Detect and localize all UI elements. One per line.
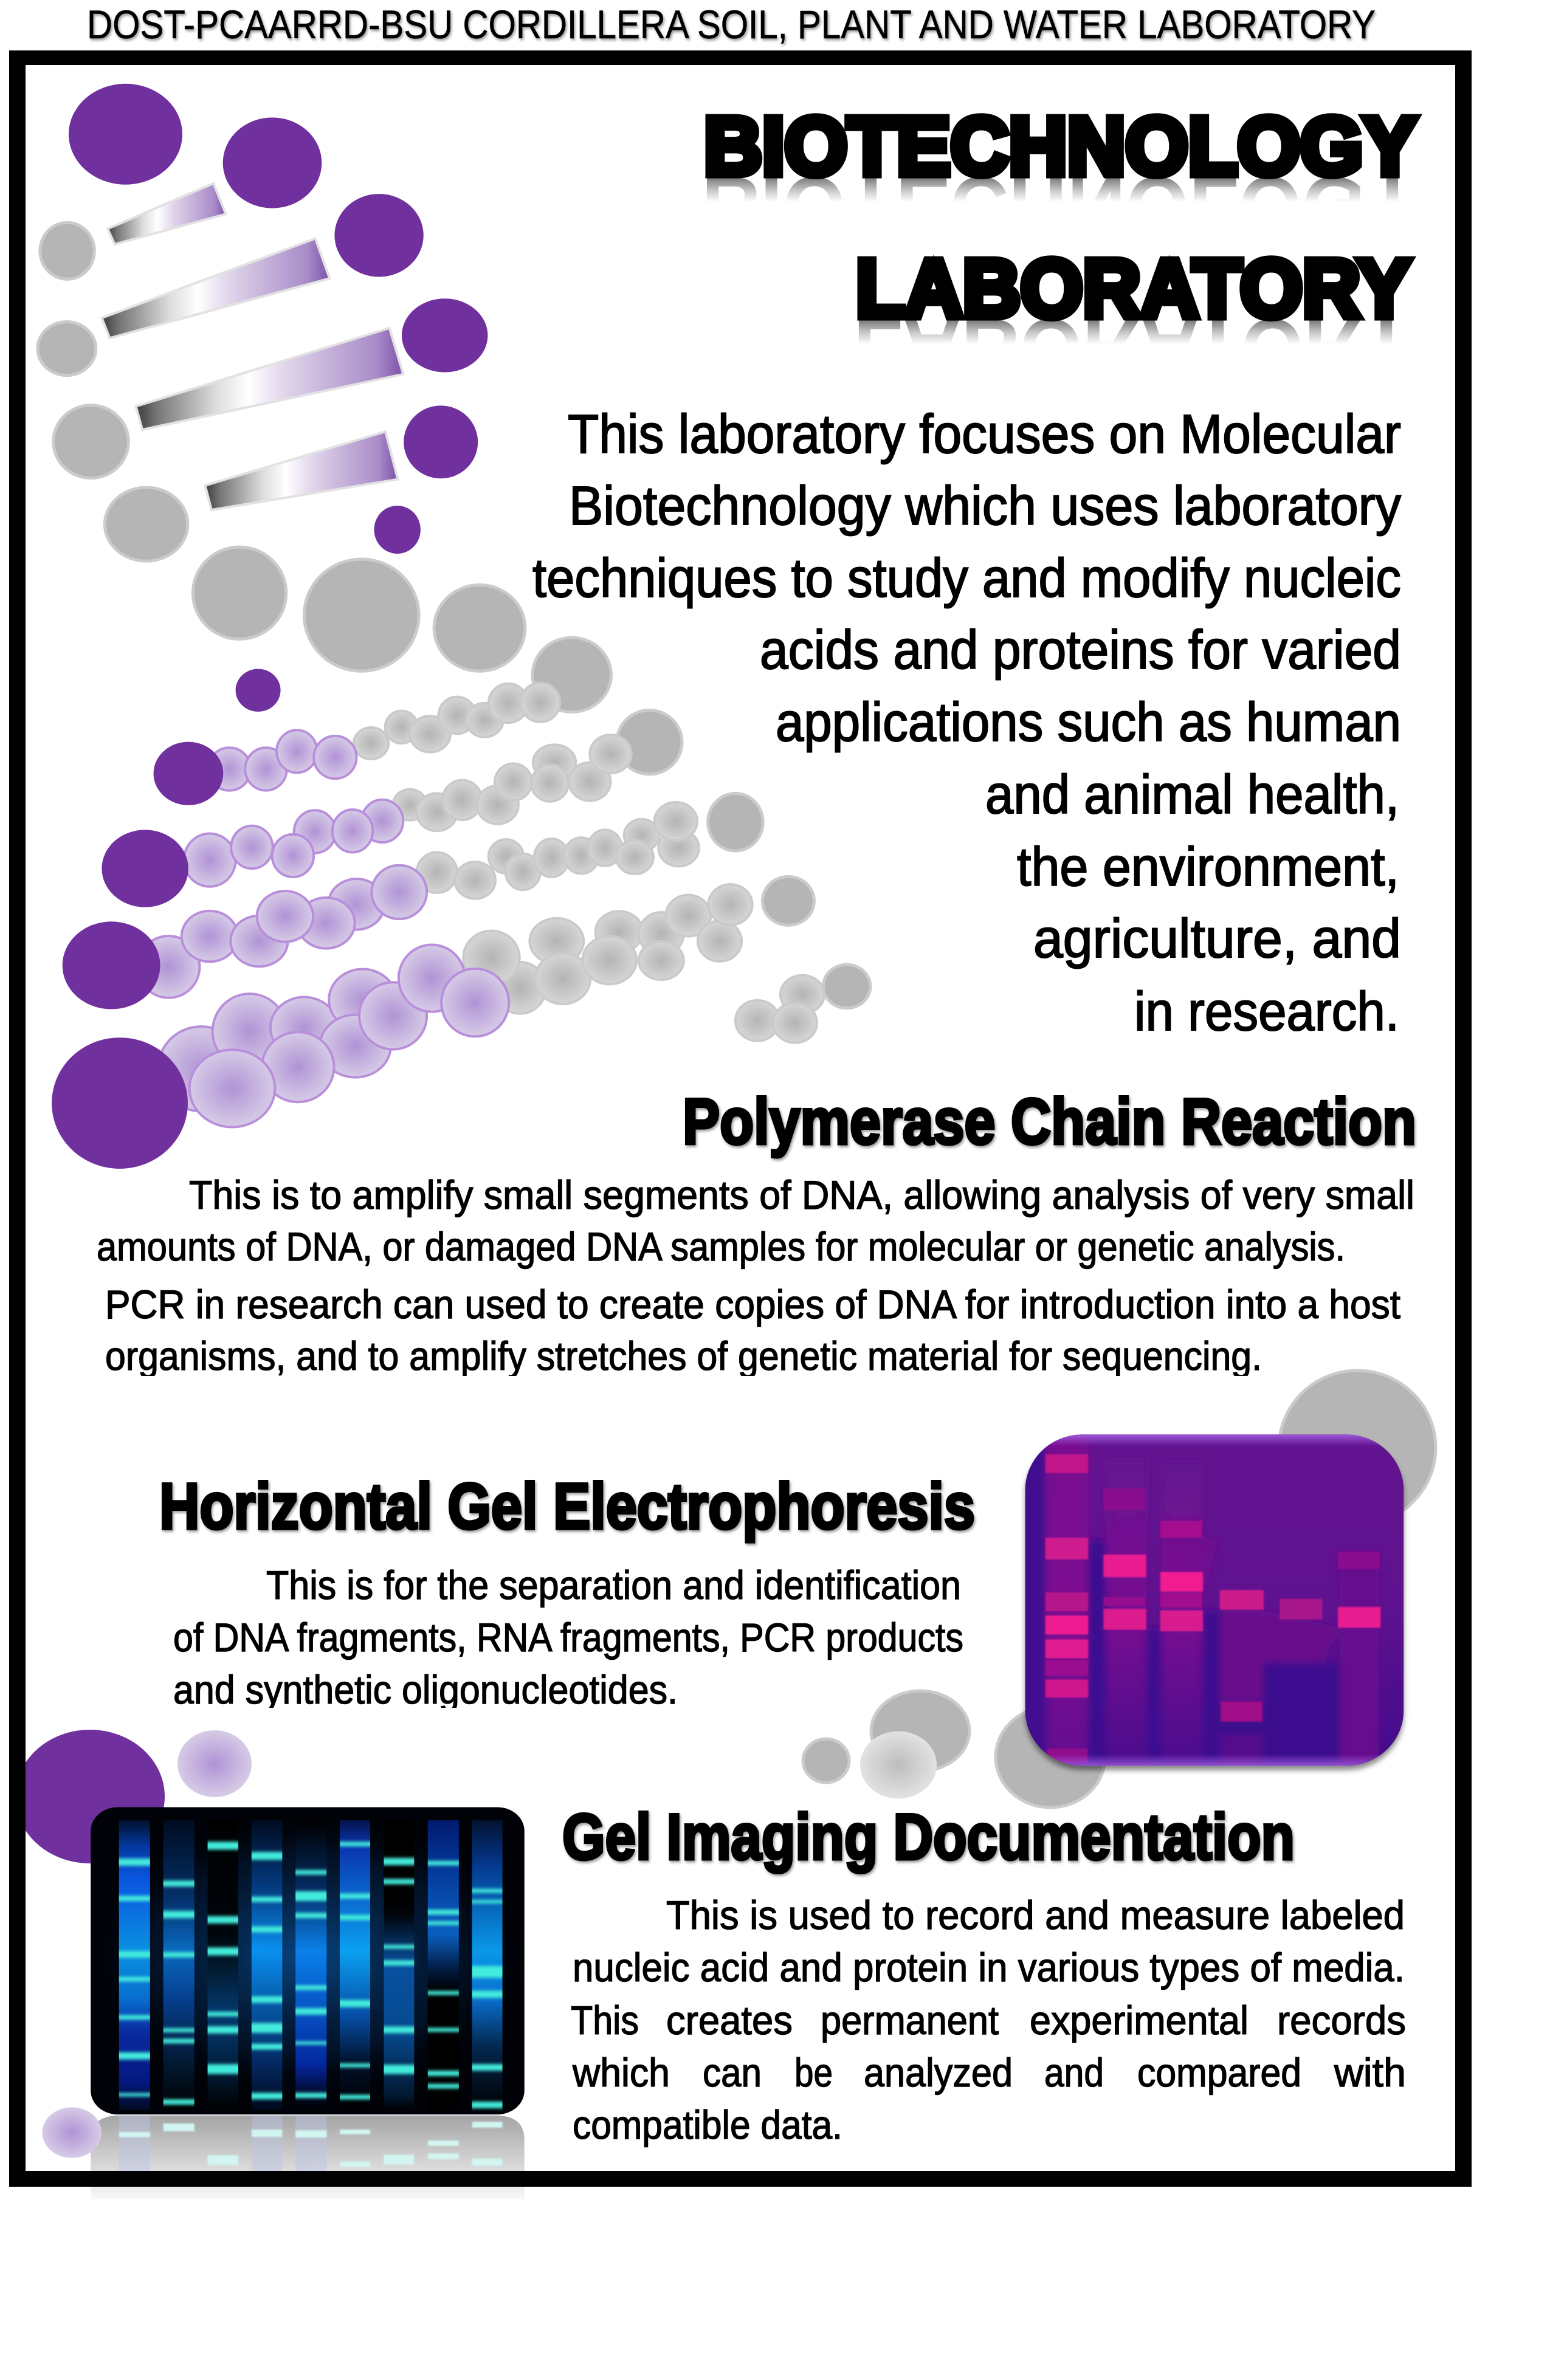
bubble row 3 bbox=[138, 802, 699, 998]
gel imaging paragraph bbox=[571, 1893, 1406, 2147]
bubble row 5 bbox=[735, 975, 824, 1043]
PCR paragraph: This is to amplify small segments of DNA, allowing analysis of very small bbox=[189, 1172, 1414, 1217]
electrophoresis paragraph: This is for the separation and identification bbox=[266, 1563, 961, 1608]
heading: polymerase chain reaction: Polymerase Chain Reaction bbox=[683, 1085, 1416, 1158]
big purple circle behind blue gel bbox=[15, 1730, 165, 1863]
bubble row 2 bbox=[184, 735, 632, 887]
title with reflection: BIOTECHNOLOGY bbox=[701, 159, 1419, 253]
decorative grey circle behind purple gel, top right bbox=[1279, 1371, 1436, 1525]
intro paragraph: applications such as human bbox=[776, 692, 1401, 753]
intro paragraph: the environment, bbox=[1017, 837, 1399, 898]
grey circle behind purple gel, bottom left bbox=[996, 1707, 1105, 1807]
gel panel bbox=[91, 1807, 525, 2114]
gel glow and lanes bbox=[119, 1820, 503, 2111]
light purple circle on reflection bbox=[42, 2107, 102, 2158]
gel panel bbox=[1025, 1434, 1404, 1766]
heading: horizontal gel electrophoresis: Horizontal Gel Electrophoresis bbox=[159, 1470, 975, 1543]
grey helix strand bbox=[38, 222, 188, 561]
PCR paragraph: amounts of DNA, or damaged DNA samples for molecular or genetic analysis. bbox=[97, 1224, 1345, 1269]
gel imaging paragraph: This is used to record and measure labeled bbox=[666, 1893, 1405, 1938]
electrophoresis paragraph bbox=[173, 1563, 963, 1712]
gel drop shadow bbox=[1025, 1439, 1404, 1770]
gel gloss bbox=[1025, 1434, 1404, 1446]
soft lane smears bbox=[1019, 1434, 1379, 1772]
intro paragraph: This laboratory focuses on Molecular bbox=[568, 404, 1401, 465]
large grey end nodes bbox=[193, 547, 870, 1008]
intro paragraph bbox=[532, 404, 1401, 1042]
gel imaging paragraph: nucleic acid and protein in various types of media. bbox=[573, 1945, 1405, 1990]
gel imaging paragraph: creates bbox=[666, 1998, 793, 2043]
bubble row 1 bbox=[208, 683, 560, 791]
title with reflection bbox=[701, 100, 1419, 396]
gel imaging paragraph: with bbox=[1334, 2050, 1406, 2095]
gel reflection bbox=[91, 2116, 525, 2199]
gradient rungs bbox=[102, 184, 403, 510]
PCR paragraph: organisms, and to amplify stretches of genetic material for sequencing. bbox=[105, 1333, 1262, 1378]
title with reflection: LABORATORY bbox=[853, 301, 1413, 396]
intro paragraph: agriculture, and bbox=[1033, 909, 1401, 969]
heading: gel imaging documentation: Gel Imaging Documentation bbox=[562, 1800, 1295, 1873]
DNA bubble strands bbox=[52, 547, 870, 1169]
gel lanes and bands bbox=[1019, 1434, 1404, 1772]
gel imaging paragraph: permanent bbox=[821, 1998, 999, 2043]
gel imaging paragraph: and bbox=[1044, 2050, 1104, 2095]
large purple end nodes bbox=[52, 669, 281, 1169]
gel imaging paragraph: experimental bbox=[1030, 1998, 1249, 2043]
intro paragraph: Biotechnology which uses laboratory bbox=[569, 476, 1401, 537]
purple gel image bbox=[1019, 1434, 1404, 1772]
light purple circle above blue gel bbox=[177, 1730, 252, 1797]
gel imaging paragraph: This bbox=[571, 1998, 639, 2043]
electrophoresis paragraph: of DNA fragments, RNA fragments, PCR products bbox=[173, 1615, 963, 1660]
gel imaging paragraph: be bbox=[794, 2050, 833, 2095]
PCR paragraph bbox=[97, 1172, 1414, 1378]
gel imaging paragraph: compared bbox=[1137, 2050, 1301, 2095]
intro paragraph: acids and proteins for varied bbox=[760, 620, 1401, 681]
gel imaging paragraph: which bbox=[572, 2050, 670, 2095]
blue gel image with reflection bbox=[42, 1807, 530, 2199]
intro paragraph: and animal health, bbox=[985, 765, 1399, 825]
DNA bands bbox=[119, 1842, 503, 2108]
intro paragraph: techniques to study and modify nucleic bbox=[532, 548, 1401, 609]
gel imaging paragraph: can bbox=[703, 2050, 762, 2095]
electrophoresis paragraph: and synthetic oligonucleotides. bbox=[173, 1667, 678, 1712]
DNA helix top: nodes and rungs bbox=[38, 84, 487, 561]
title with reflection: BIOTECHNOLOGY bbox=[704, 100, 1417, 192]
purple helix strand bbox=[69, 84, 487, 554]
gel imaging paragraph: analyzed bbox=[864, 2050, 1013, 2095]
gel imaging paragraph: compatible data. bbox=[573, 2102, 842, 2147]
bubble row 4 bbox=[158, 884, 753, 1127]
title with reflection: LABORATORY bbox=[856, 242, 1411, 334]
gel imaging paragraph: records bbox=[1277, 1998, 1406, 2043]
top header: DOST-PCAARRD-BSU CORDILLERA SOIL, PLANT AND WATER LABORATORY bbox=[87, 2, 1376, 47]
grey circle cluster near gel bbox=[803, 1691, 970, 1799]
PCR paragraph: PCR in research can used to create copies of DNA for introduction into a host bbox=[105, 1282, 1400, 1327]
intro paragraph: in research. bbox=[1134, 982, 1399, 1042]
